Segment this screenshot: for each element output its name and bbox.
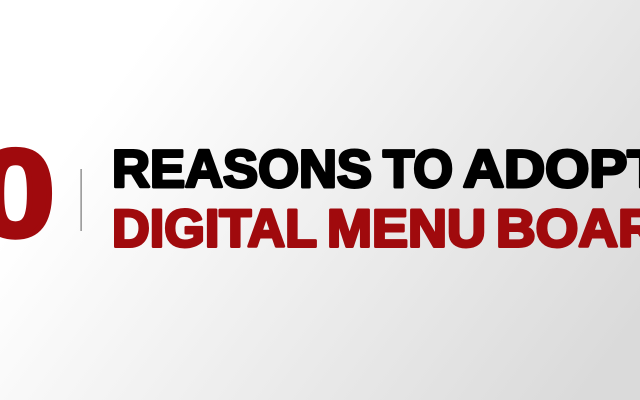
heading line 2: DIGITAL MENU BOARDS: MENU (327, 200, 486, 258)
heading line 2: DIGITAL MENU BOARDS: DIGITAL (112, 200, 317, 258)
heading line 2: DIGITAL MENU BOARDS (112, 200, 640, 258)
heading line 1: REASONS TO ADOPT: TO (383, 140, 453, 199)
divider (80, 169, 82, 231)
heading line 1: REASONS TO ADOPT: REASONS (112, 140, 372, 199)
heading line 1: REASONS TO ADOPT (112, 140, 640, 199)
